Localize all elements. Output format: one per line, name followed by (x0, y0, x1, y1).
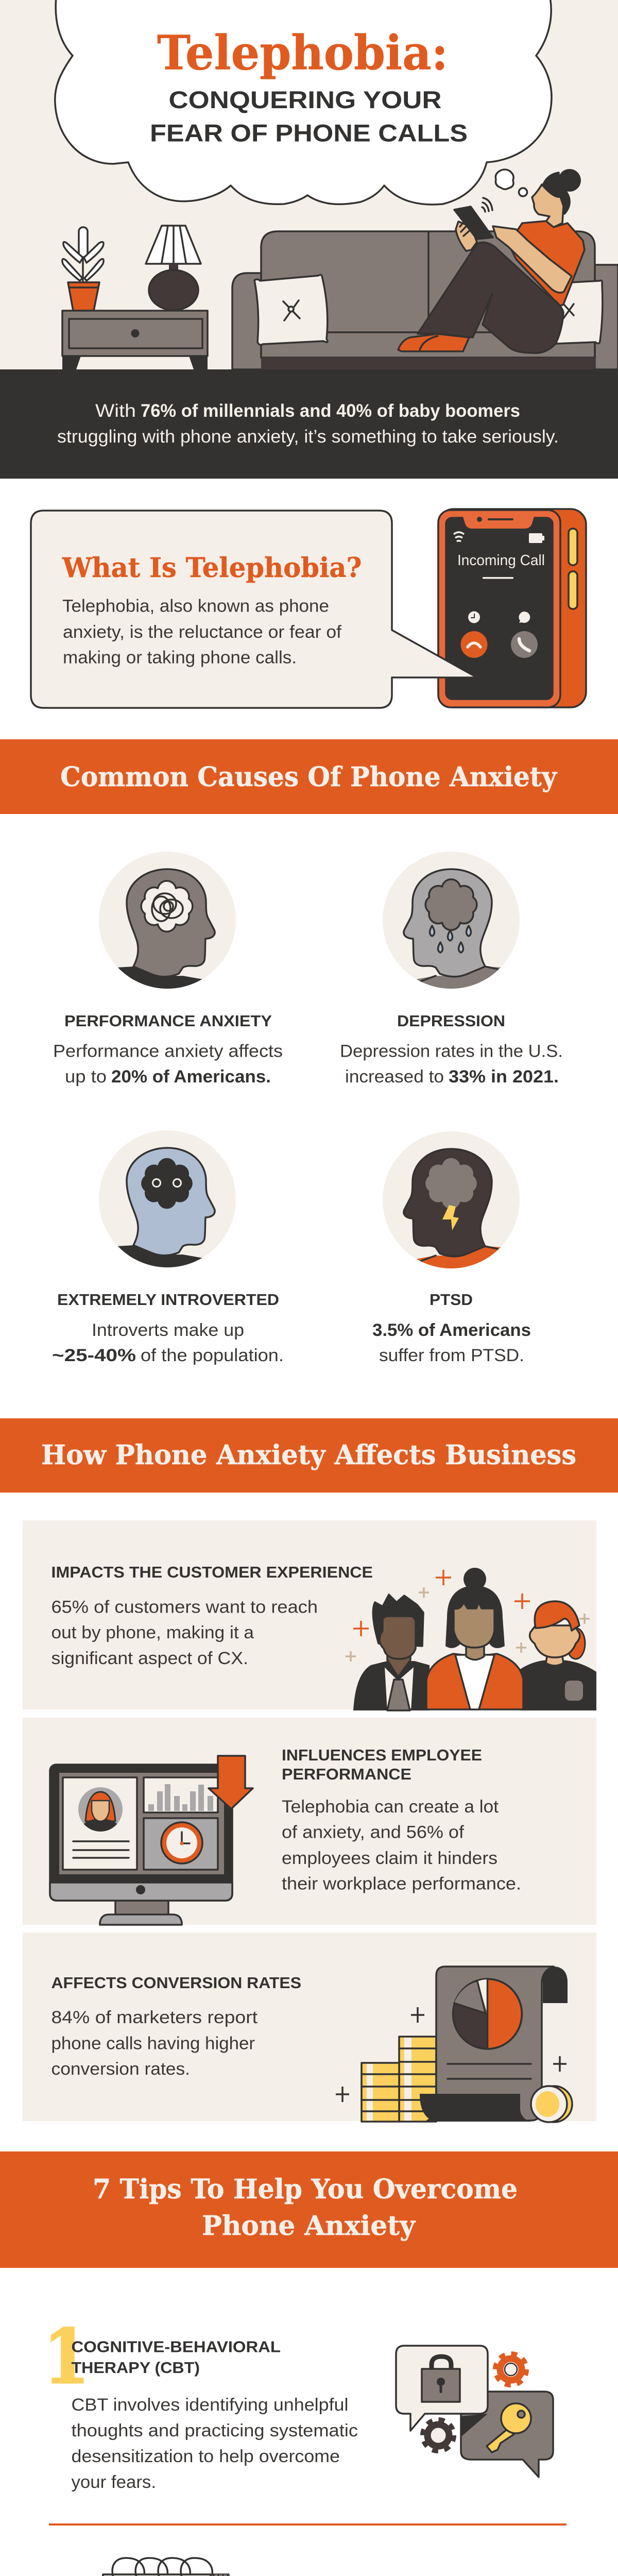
sparkles (353, 1570, 530, 1636)
coin (536, 2086, 572, 2122)
pie chart (453, 1979, 522, 2049)
stat: ~25-40% (52, 1346, 136, 1365)
callout (31, 511, 477, 708)
body: Telephobia can create a lot (282, 1797, 499, 1817)
sofa (232, 231, 618, 369)
title: CONQUERING YOUR (169, 86, 442, 113)
intro band: struggling with phone anxiety, it’s something to take seriously. (57, 427, 559, 447)
icon: monitor with arrow (50, 1756, 253, 1925)
body: their workplace performance. (282, 1874, 521, 1894)
gear dark (422, 2419, 454, 2451)
icon: signal waves (482, 198, 492, 212)
cause: performance anxiety (53, 852, 283, 1087)
stat: of the population. (141, 1346, 284, 1365)
plant (62, 227, 104, 311)
body (52, 2008, 258, 2079)
stat (372, 1320, 531, 1365)
coin stacks (362, 2037, 436, 2122)
banner: tips: Phone Anxiety (202, 2210, 416, 2242)
intro band (0, 369, 618, 479)
panel: conversion rates (23, 1933, 596, 2122)
stat (340, 1042, 563, 1087)
stat: increased to (345, 1067, 444, 1087)
heading: THERAPY (CBT) (71, 2359, 200, 2377)
heading: INFLUENCES EMPLOYEE (282, 1746, 482, 1764)
cause: extremely introverted (52, 1130, 284, 1365)
title: FEAR OF PHONE CALLS (150, 120, 468, 146)
key (487, 2403, 531, 2452)
banner: business (0, 1418, 618, 1493)
heading: PERFORMANCE (282, 1765, 411, 1783)
title: Telephobia: (157, 25, 448, 80)
body (71, 2395, 358, 2492)
incoming call label: Incoming Call (457, 552, 545, 569)
body: 65% of customers want to reach (52, 1598, 318, 1617)
heading: IMPACTS THE CUSTOMER EXPERIENCE (52, 1563, 373, 1581)
body (52, 1598, 318, 1668)
body: phone calls having higher (52, 2034, 255, 2054)
intro band: With (95, 401, 136, 421)
banner: tips (0, 2151, 618, 2268)
person on sofa (398, 169, 585, 353)
icon: rain cloud head (383, 852, 520, 992)
body: 84% of marketers report (52, 2008, 258, 2027)
banner: tips: 7 Tips To Help You Overcome (93, 2174, 518, 2205)
cause: depression (340, 852, 563, 1087)
icon: remind clock (468, 611, 480, 623)
gear orange (495, 2353, 527, 2385)
banner: business: How Phone Anxiety Affects Business (41, 1439, 576, 1471)
icon: lock and key bubbles (396, 2346, 553, 2477)
stat: 20% of Americans. (111, 1067, 271, 1087)
definition: Telephobia, also known as phone (62, 597, 329, 616)
panel: customer experience (23, 1520, 596, 1710)
body (282, 1797, 521, 1894)
hero section (0, 0, 618, 369)
what is telephobia section (31, 509, 586, 708)
title: DEPRESSION (397, 1012, 505, 1030)
icon: notepad and pencil (57, 2558, 229, 2576)
title (150, 25, 468, 146)
panel: employee performance (23, 1718, 596, 1925)
icon: message (519, 612, 530, 623)
body: out by phone, making it a (52, 1623, 254, 1642)
heading: COGNITIVE-BEHAVIORAL (71, 2338, 281, 2355)
title: EXTREMELY INTROVERTED (57, 1291, 279, 1309)
body: thoughts and practicing systematic (71, 2421, 358, 2441)
body: significant aspect of CX. (52, 1649, 248, 1668)
icon: coins and report (336, 1967, 572, 2122)
banner: causes (0, 739, 618, 814)
heading: What Is Telephobia? (62, 552, 362, 584)
body: CBT involves identifying unhelpful (71, 2395, 348, 2415)
stat (52, 1320, 284, 1365)
heading (71, 2338, 281, 2377)
icon: small thought bubbles (495, 170, 527, 196)
stat: 33% in 2021. (449, 1067, 559, 1087)
body: of anxiety, and 56% of (282, 1823, 465, 1842)
icon: storm head (383, 1131, 520, 1272)
intro band: 76% of millennials and 40% of baby boomers (141, 401, 520, 421)
left person (353, 1661, 430, 1710)
stat: Depression rates in the U.S. (340, 1042, 563, 1061)
title: PTSD (430, 1291, 473, 1309)
center person (464, 1568, 486, 1590)
title: PERFORMANCE ANXIETY (64, 1012, 272, 1030)
stat: up to (65, 1067, 107, 1087)
stat: 3.5% of Americans (372, 1320, 531, 1340)
phone illustration (438, 509, 586, 707)
definition (62, 597, 342, 668)
divider (49, 2523, 566, 2526)
number: 1 (43, 2313, 90, 2401)
plus marks (336, 2007, 566, 2102)
definition: anxiety, is the reluctance or fear of (63, 622, 342, 642)
cause: ptsd (372, 1131, 531, 1365)
stat: Performance anxiety affects (53, 1042, 283, 1061)
report sheet (427, 1967, 554, 2121)
accept button (511, 631, 538, 658)
side table (62, 311, 208, 369)
right person (520, 1660, 596, 1710)
heading (282, 1746, 482, 1783)
body: desensitization to help overcome (71, 2447, 340, 2466)
decline button (460, 631, 487, 658)
banner: causes: Common Causes Of Phone Anxiety (60, 761, 558, 793)
icon: three people (346, 1568, 596, 1710)
stat: suffer from PTSD. (379, 1346, 524, 1365)
tip 1 (43, 2313, 553, 2492)
body: your fears. (71, 2472, 156, 2492)
icon: hiding head (99, 1130, 236, 1271)
thought cloud (55, 0, 552, 205)
body: employees claim it hinders (282, 1849, 497, 1868)
icon: tangled head (99, 852, 236, 992)
lamp (146, 226, 201, 310)
icon: wifi (454, 532, 464, 541)
stat: Introverts make up (92, 1320, 244, 1340)
icon: battery (529, 533, 544, 543)
tip 2 (57, 2558, 565, 2576)
body: conversion rates. (52, 2059, 190, 2079)
heading: AFFECTS CONVERSION RATES (52, 1974, 301, 1992)
definition: making or taking phone calls. (63, 648, 297, 668)
stat (53, 1042, 283, 1087)
